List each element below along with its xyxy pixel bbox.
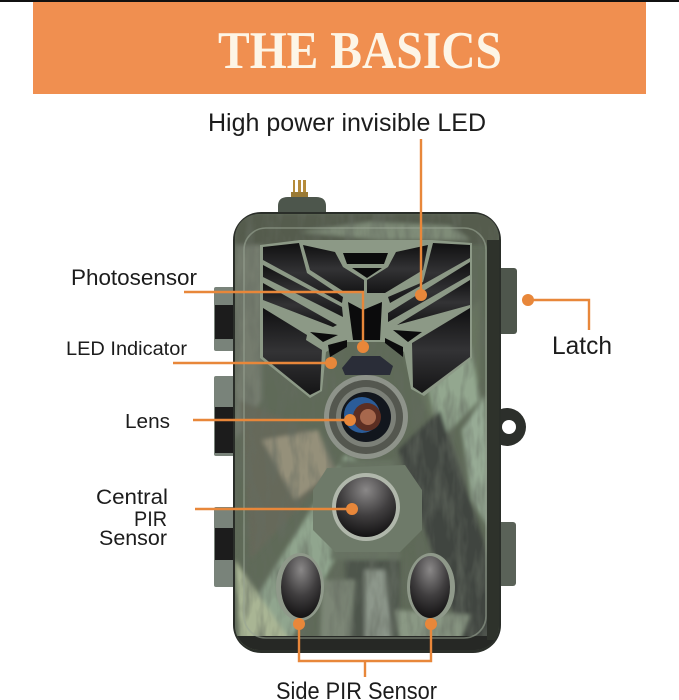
label: lens: Lens <box>125 411 170 433</box>
LED small windows <box>310 253 422 357</box>
arrow: latch leader <box>522 294 589 330</box>
arrow: photosensor leader <box>184 292 369 353</box>
label: central PIR sensor: Central <box>96 486 168 509</box>
label: side PIR sensor <box>276 618 437 700</box>
arrow: LED leader <box>415 139 427 301</box>
camera body <box>233 212 501 653</box>
label: high power LED <box>208 109 486 301</box>
label: latch <box>522 294 612 360</box>
label: latch: Latch <box>552 332 612 360</box>
indicator plate <box>342 356 393 375</box>
side PIR sensors <box>276 553 455 621</box>
label: photosensor <box>71 265 369 353</box>
label: LED indicator: LED Indicator <box>66 339 188 360</box>
arrow: indicator leader <box>173 357 337 369</box>
arrow: side PIR bracket <box>293 618 437 677</box>
label: high power LED: High power invisible LED <box>208 109 486 137</box>
icon: antenna <box>278 180 326 228</box>
label: LED indicator <box>66 339 337 369</box>
title: THE BASICS <box>218 22 502 80</box>
LED dark segments <box>263 243 470 395</box>
label: lens <box>125 411 356 433</box>
right latches and mount ear <box>488 268 526 586</box>
camouflage pattern <box>235 214 499 653</box>
left clips <box>214 287 238 587</box>
label: central PIR sensor: PIR <box>134 508 167 531</box>
arrow: central PIR leader <box>195 503 358 515</box>
LED array panel <box>260 240 472 398</box>
header banner <box>33 2 646 94</box>
label: central PIR sensor: Sensor <box>99 527 167 550</box>
arrow: lens leader <box>193 414 356 426</box>
lens <box>324 375 408 459</box>
body bezel highlight <box>244 228 486 638</box>
label: central PIR sensor <box>96 486 358 550</box>
camera illustration <box>214 180 526 653</box>
central PIR sensor <box>313 465 422 552</box>
top black edge <box>0 0 679 2</box>
label: photosensor: Photosensor <box>71 265 197 290</box>
